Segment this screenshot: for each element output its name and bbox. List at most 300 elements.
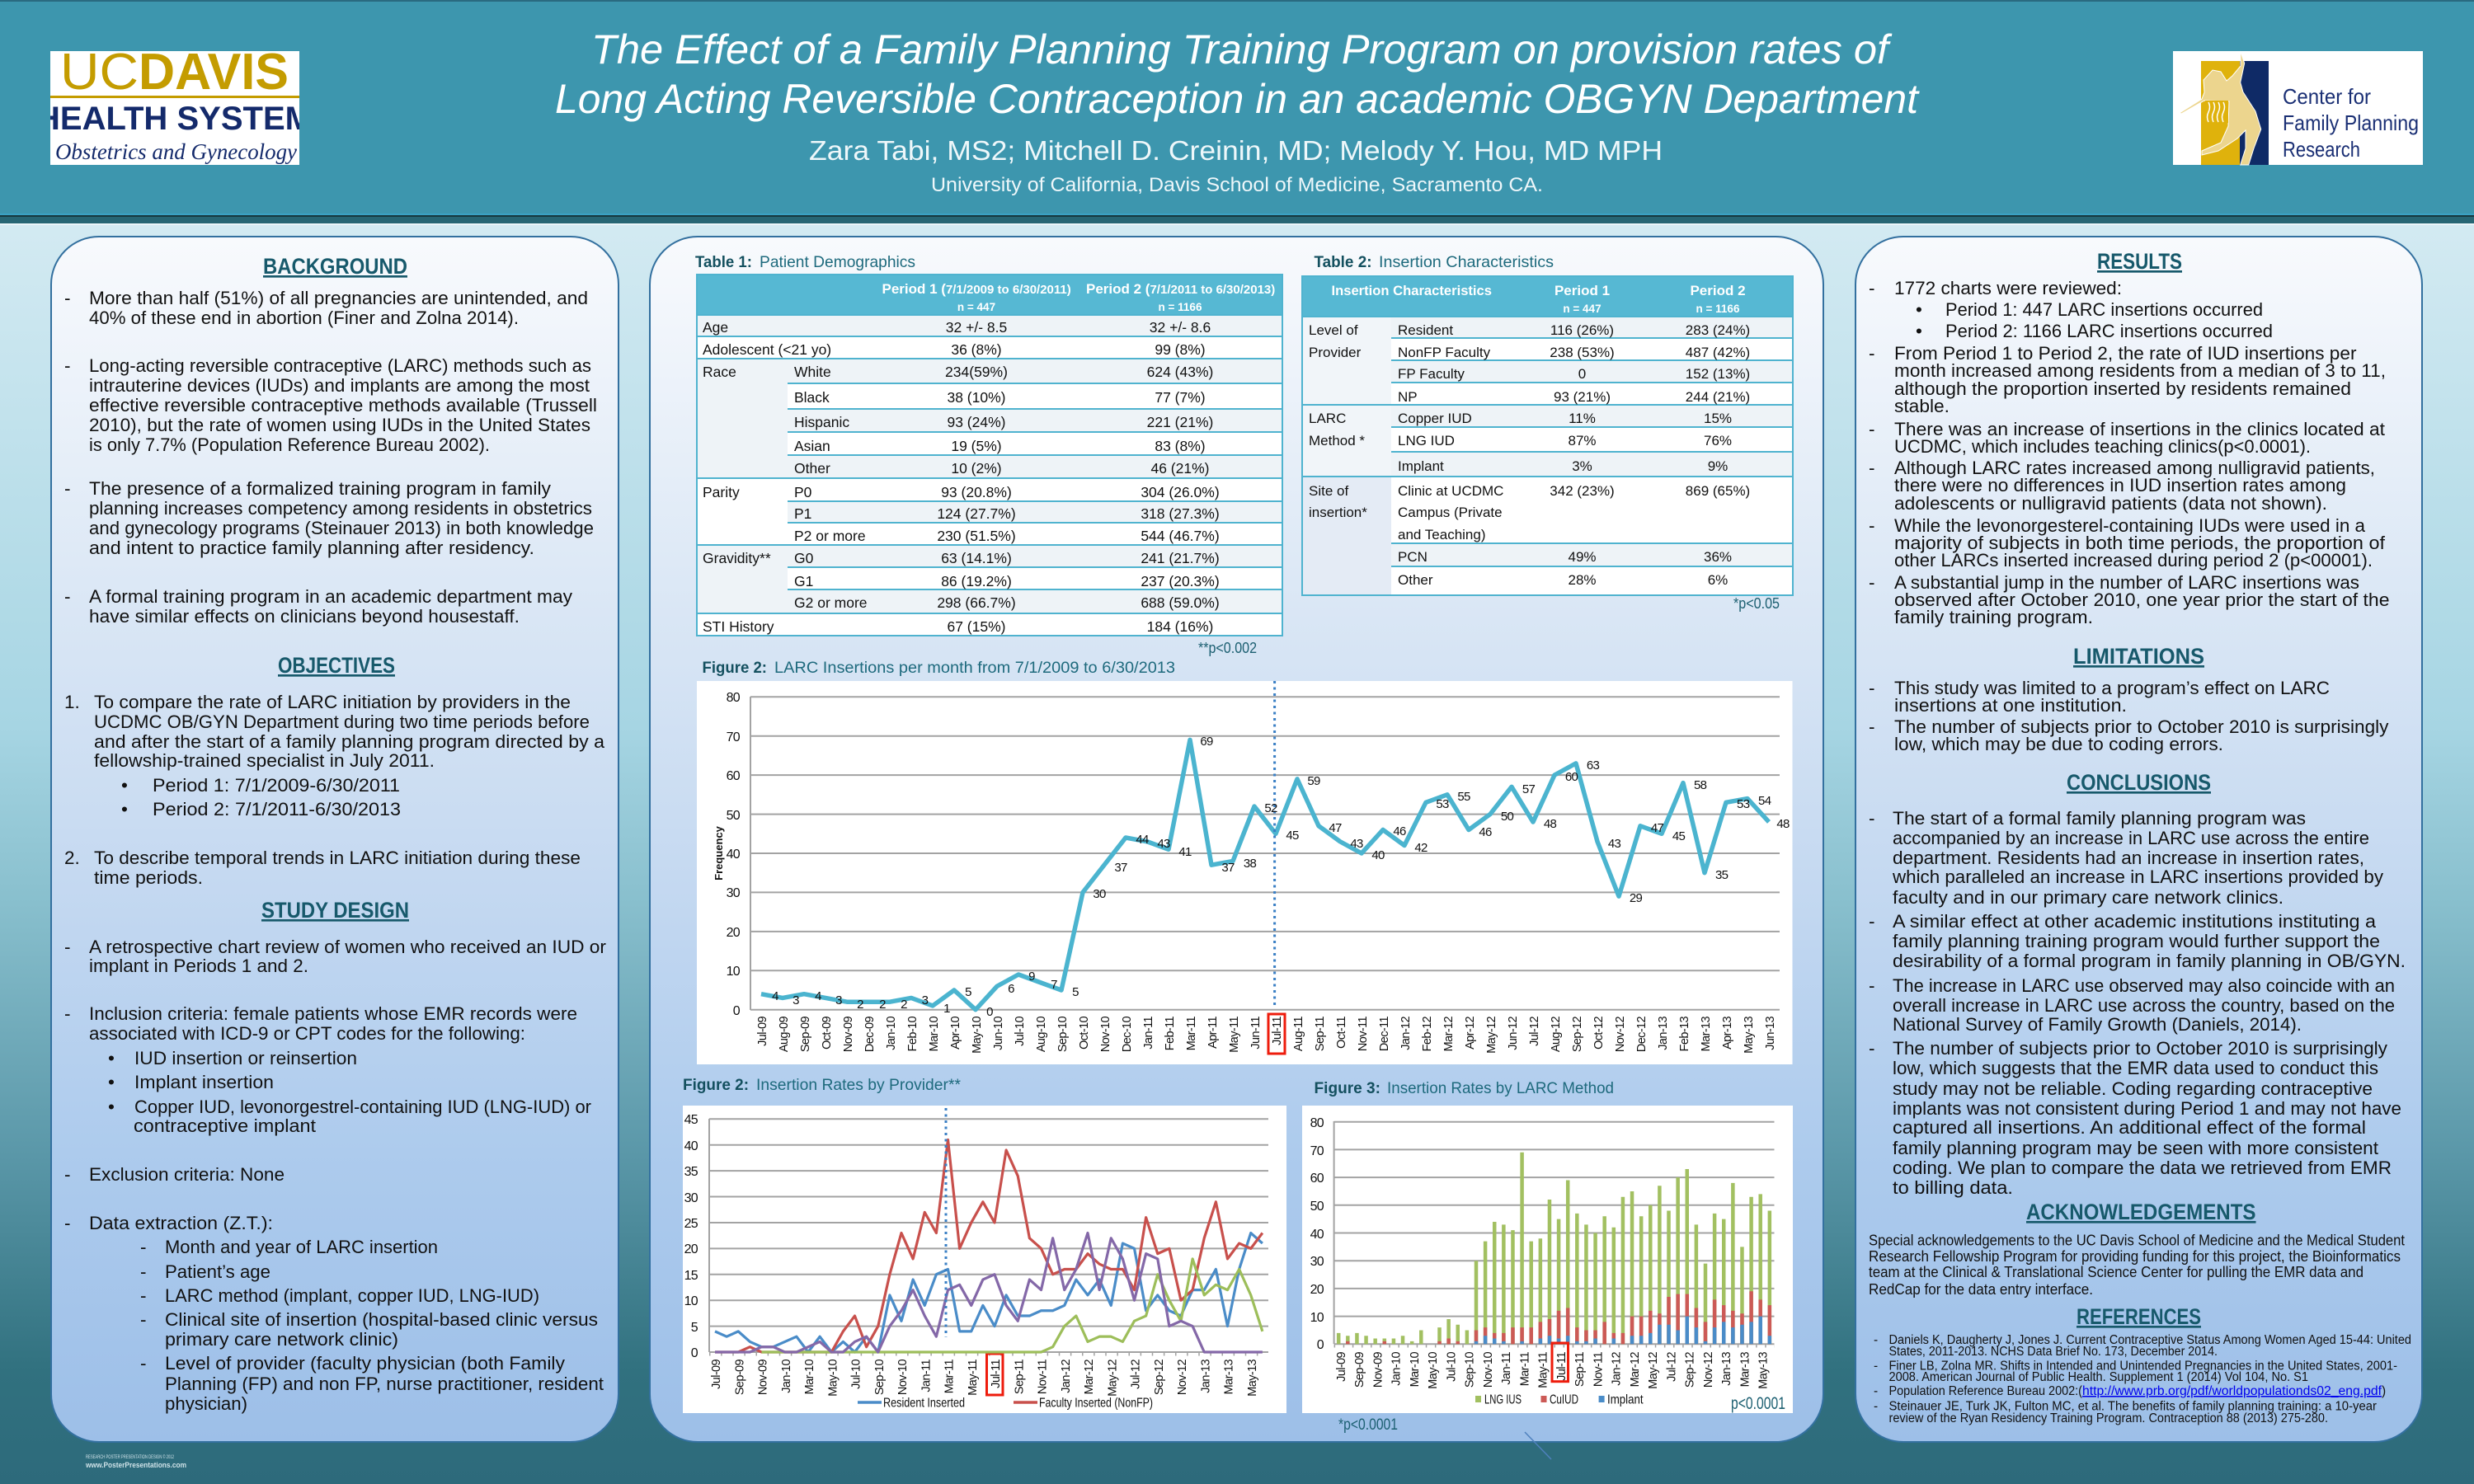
text block: limitations: -	[1869, 716, 1875, 737]
line chart: insertion rates by provider: Jul-11	[990, 1359, 1003, 1388]
table 1: patient demographics: 10 (2%)	[951, 460, 1002, 477]
text block: study design: -	[140, 1353, 147, 1374]
text block: acknowledgements: Research Fellowship Program for providing funding for this project, the Bioinformatics	[1869, 1248, 2401, 1265]
logo: UC Davis Health System	[50, 51, 299, 165]
text block: conclusions: desirability of a formal program in family planning in OB/GYN.	[1893, 951, 2406, 971]
text block: study design: -	[140, 1309, 147, 1330]
line chart: LARC insertions per month: Feb-12	[1421, 1016, 1434, 1051]
text block: results: There was an increase of insertions in the clinics located at	[1894, 419, 2386, 439]
line chart: LARC insertions per month: 47	[1651, 821, 1663, 835]
table 2: insertion characteristics: 76%	[1704, 433, 1732, 448]
line chart: LARC insertions per month	[697, 681, 1793, 1064]
text block: references: http://www.prb.org/pdf/worldpopulationds02_eng.pdf	[2082, 1384, 2382, 1398]
line chart: LARC insertions per month: Oct-09	[821, 1016, 834, 1050]
text block: study design: associated with ICD-9 or CPT codes for the following:	[89, 1023, 525, 1044]
table 2 title: Insertion Characteristics	[1379, 253, 1554, 271]
table 1: patient demographics: 93 (20.8%)	[941, 484, 1012, 500]
text block: conclusions	[1869, 808, 2406, 1198]
line chart: LARC insertions per month: Apr-11	[1206, 1016, 1220, 1049]
table 1: patient demographics: 298 (66.7%)	[937, 594, 1016, 611]
figure title: insertion rates by provider: Insertion Rates by Provider**	[756, 1076, 961, 1094]
table 1: patient demographics: 241 (21.7%)	[1141, 550, 1220, 566]
line chart: insertion rates by provider: May-10	[826, 1359, 840, 1397]
text block: references: -	[1874, 1384, 1878, 1398]
stacked bar chart: insertion rates by LARC method: Mar-11	[1518, 1351, 1531, 1386]
line chart: insertion rates by provider	[683, 1106, 1286, 1413]
text block: references: Population Reference Bureau 2002:(	[1888, 1384, 2083, 1398]
text block: study design: LARC method (implant, copper IUD, LNG-IUD)	[165, 1285, 539, 1306]
table 2: insertion characteristics: 238 (53%)	[1550, 345, 1615, 360]
text block: background: -	[64, 478, 71, 499]
logo: Center for Family Planning Research: Research	[2283, 137, 2360, 162]
stacked bar chart: insertion rates by LARC method: 10	[1310, 1311, 1324, 1325]
table 1: patient demographics: G0	[794, 550, 814, 566]
table 1: patient demographics: 234(59%)	[945, 364, 1008, 380]
text block: results	[1869, 278, 2390, 627]
table 2: insertion characteristics: n = 1166	[1696, 303, 1740, 315]
text block: references: Steinauer JE, Turk JK, Fulton MC, et al. The benefits of family planning training: a 10-year	[1888, 1400, 2377, 1413]
line chart: insertion rates by provider: 10	[684, 1294, 698, 1308]
text block: background: -	[64, 586, 71, 607]
stacked bar chart: insertion rates by LARC method: May-10	[1427, 1351, 1440, 1389]
text block: study design: -	[140, 1237, 147, 1257]
text block: limitations	[1869, 678, 2389, 754]
text block: background: have similar effects on clinicians beyond housestaff.	[89, 606, 520, 627]
text block: study design: primary care network clinic)	[165, 1329, 398, 1350]
table 1: patient demographics: Parity	[703, 484, 740, 500]
table 1: patient demographics: STI History	[703, 618, 774, 635]
table 1: patient demographics: 36 (8%)	[951, 341, 1002, 358]
line chart: LARC insertions per month: 53	[1436, 797, 1449, 811]
table 2: insertion characteristics: insertion*	[1309, 505, 1367, 520]
line chart: LARC insertions per month: Aug-10	[1035, 1016, 1048, 1052]
text block: conclusions: -	[1869, 911, 1875, 932]
text block: objectives: 2.	[64, 848, 80, 868]
table 1: patient demographics: 32 +/- 8.6	[1150, 319, 1211, 336]
table 2: insertion characteristics: 116 (26%)	[1550, 322, 1614, 338]
line chart: LARC insertions per month: Feb-11	[1164, 1016, 1177, 1050]
table 2: insertion characteristics: Provider	[1309, 345, 1362, 360]
text block: study design: -	[140, 1261, 147, 1282]
table 1: patient demographics: 221 (21%)	[1147, 414, 1213, 430]
line chart: LARC insertions per month: Jul-12	[1528, 1016, 1541, 1046]
line chart: insertion rates by provider: Nov-10	[896, 1359, 910, 1395]
text block: results: A substantial jump in the number of LARC insertions was	[1894, 572, 2359, 593]
text block: background	[64, 288, 597, 627]
stacked bar chart: insertion rates by LARC method: 60	[1310, 1172, 1324, 1186]
table 2: insertion characteristics: Level of	[1309, 322, 1358, 338]
line chart: LARC insertions per month: 54	[1758, 794, 1771, 808]
line chart: insertion rates by provider: 20	[684, 1242, 698, 1256]
table 1: patient demographics: Period 2 (7/1/2011 to 6/30/2013)	[1086, 281, 1275, 297]
line chart: LARC insertions per month: Feb-13	[1678, 1016, 1691, 1051]
line chart: LARC insertions per month: 0	[986, 1005, 993, 1019]
line chart: LARC insertions per month: 9	[1028, 970, 1035, 984]
table 2: insertion characteristics: Insertion Characteristics	[1331, 283, 1492, 298]
stacked bar chart: insertion rates by LARC method: Mar-10	[1409, 1351, 1422, 1387]
text block: objectives: To describe temporal trends in LARC initiation during these	[94, 848, 581, 868]
line chart: LARC insertions per month: Jan-12	[1399, 1016, 1413, 1050]
text block: conclusions: The start of a formal family planning program was	[1893, 808, 2306, 829]
text block: background: and intent to practice family planning after residency.	[89, 538, 534, 558]
figure title: LARC insertions per month: Figure 2:	[703, 659, 767, 677]
line chart: LARC insertions per month: Jul-11	[1271, 1016, 1284, 1045]
line chart: insertion rates by provider: Jan-13	[1199, 1359, 1212, 1393]
text block: conclusions: accompanied by an increase in LARC use across the entire	[1893, 828, 2369, 848]
line chart: LARC insertions per month: Jun-10	[992, 1016, 1005, 1050]
table 2: insertion characteristics: 6%	[1708, 572, 1728, 588]
text block: study design: -	[140, 1285, 147, 1306]
line chart: LARC insertions per month: Dec-09	[863, 1016, 877, 1052]
table 2: insertion characteristics: NP	[1398, 389, 1418, 405]
logo: Center for Family Planning Research: Center for	[2283, 84, 2371, 109]
text block: results: month increased among residents from a median of 3 to 11,	[1894, 360, 2386, 381]
table 1 title: Table 1:	[695, 253, 752, 271]
text block: objectives: Period 1: 7/1/2009-6/30/2011	[153, 775, 400, 796]
text block: study design: -	[64, 1003, 71, 1024]
text block: references: 2008. American Journal of Public Health. Supplement 1 (2014) Vol 104, No. S1	[1888, 1370, 2308, 1384]
stacked bar chart: insertion rates by LARC method: p<0.0001	[1731, 1394, 1785, 1413]
line chart: LARC insertions per month: 70	[727, 730, 741, 744]
heading: background: BACKGROUND	[263, 254, 407, 279]
table 2: insertion characteristics: 152 (13%)	[1686, 366, 1750, 382]
line chart: LARC insertions per month: 69	[1200, 735, 1213, 749]
text block: limitations: low, which may be due to coding errors.	[1894, 734, 2223, 754]
line chart: insertion rates by provider: 15	[684, 1269, 698, 1283]
stacked bar chart: insertion rates by LARC method: Jan-12	[1611, 1351, 1624, 1386]
line chart: insertion rates by provider: 30	[684, 1191, 698, 1205]
table 2: insertion characteristics: Method *	[1309, 433, 1365, 448]
line chart: LARC insertions per month: 43	[1608, 837, 1620, 851]
text block: conclusions: The number of subjects prior to October 2010 is surprisingly	[1893, 1038, 2388, 1059]
table 1: patient demographics: 184 (16%)	[1147, 618, 1213, 635]
line chart: LARC insertions per month: Feb-10	[906, 1016, 920, 1051]
line chart: LARC insertions per month: 4	[815, 989, 821, 1003]
line chart: LARC insertions per month: 1	[943, 1002, 950, 1016]
table 2: insertion characteristics: Site of	[1309, 483, 1348, 499]
stacked bar chart: insertion rates by LARC method: Jan-13	[1720, 1351, 1733, 1386]
panel: middle column (tables and figures)	[650, 237, 1823, 1442]
line chart: LARC insertions per month: Mar-11	[1185, 1016, 1198, 1050]
text block: background: planning increases competency among residents in obstetrics	[89, 498, 592, 519]
line chart: LARC insertions per month: Aug-12	[1550, 1016, 1563, 1052]
line chart: LARC insertions per month: 63	[1587, 758, 1599, 773]
table 2: insertion characteristics: LNG IUD	[1398, 433, 1455, 448]
table 1 footnote: **p<0.002	[1198, 640, 1257, 656]
text block: conclusions: -	[1869, 1038, 1875, 1059]
authors: Zara Tabi, MS2; Mitchell D. Creinin, MD; Melody Y. Hou, MD MPH	[809, 135, 1663, 166]
text block: results: -	[1869, 572, 1875, 593]
text block: references: -	[1874, 1400, 1878, 1413]
table 1: patient demographics: 99 (8%)	[1155, 341, 1206, 358]
text block: objectives: To compare the rate of LARC initiation by providers in the	[94, 692, 571, 712]
line chart: LARC insertions per month: Sep-11	[1314, 1016, 1327, 1051]
stacked bar chart: insertion rates by LARC method: May-11	[1537, 1351, 1550, 1388]
table 2 footnote: *p<0.05	[1733, 595, 1780, 612]
text block: results: stable.	[1894, 396, 1950, 416]
line chart: LARC insertions per month: Jun-12	[1507, 1016, 1520, 1050]
table 2: insertion characteristics: 869 (65%)	[1686, 483, 1750, 499]
stacked bar chart: insertion rates by LARC method: Nov-09	[1372, 1351, 1385, 1388]
text block: conclusions: -	[1869, 808, 1875, 829]
line chart: LARC insertions per month: 46	[1393, 824, 1406, 838]
table 2: insertion characteristics: 342 (23%)	[1550, 483, 1615, 499]
line chart: LARC insertions per month: 38	[1244, 857, 1256, 871]
logo: Center for Family Planning Research	[2173, 51, 2423, 165]
line chart: insertion rates by provider: May-13	[1246, 1359, 1259, 1397]
line chart: LARC insertions per month: 40	[1371, 848, 1385, 862]
stacked bar chart: insertion rates by LARC method: May-13	[1757, 1351, 1770, 1389]
line chart: LARC insertions per month: 48	[1776, 817, 1790, 831]
table 1: patient demographics: 46 (21%)	[1150, 460, 1210, 477]
line chart: insertion rates by provider: 5	[691, 1321, 698, 1335]
text block: results: -	[1869, 343, 1875, 364]
line chart: insertion rates by provider: Sep-10	[873, 1359, 887, 1395]
table 2: insertion characteristics: 49%	[1568, 549, 1597, 565]
table 1: patient demographics: Period 1 (7/1/2009 to 6/30/2011)	[882, 281, 1071, 297]
text block: acknowledgements: Special acknowledgements to the UC Davis School of Medicine and the Medical Student	[1869, 1232, 2405, 1248]
footer credit	[85, 1454, 186, 1470]
table 1: patient demographics: 67 (15%)	[947, 618, 1006, 635]
line chart: LARC insertions per month: 53	[1737, 797, 1750, 811]
stacked bar chart: insertion rates by LARC method: 70	[1310, 1144, 1324, 1158]
table 1: patient demographics: 624 (43%)	[1147, 364, 1213, 380]
text block: acknowledgements	[1869, 1232, 2405, 1298]
line chart: insertion rates by provider: 35	[684, 1165, 698, 1179]
text block: conclusions: A similar effect at other academic institutions instituting a	[1893, 911, 2376, 932]
line chart: LARC insertions per month: 20	[727, 926, 741, 940]
line chart: LARC insertions per month: 80	[727, 691, 741, 705]
line chart: LARC insertions per month: 0	[733, 1004, 741, 1018]
table 2: insertion characteristics: Copper IUD	[1398, 411, 1472, 426]
table 2: insertion characteristics: Implant	[1398, 458, 1444, 474]
heading: objectives: OBJECTIVES	[278, 653, 395, 678]
table 2: insertion characteristics	[1302, 276, 1793, 595]
text block: study design: Implant insertion	[134, 1072, 274, 1092]
stacked bar chart: insertion rates by LARC method: Nov-12	[1702, 1351, 1715, 1388]
line chart: LARC insertions per month: Jan-13	[1657, 1016, 1670, 1050]
line chart: insertion rates by provider: Mar-12	[1083, 1359, 1096, 1394]
line chart: insertion rates by provider: Nov-12	[1176, 1359, 1189, 1395]
line chart: LARC insertions per month: Frequency	[713, 825, 725, 881]
table 2: insertion characteristics: NonFP Faculty	[1398, 345, 1491, 360]
line chart: LARC insertions per month: Jan-11	[1142, 1016, 1155, 1050]
table 1: patient demographics: 124 (27.7%)	[937, 505, 1016, 522]
line chart: LARC insertions per month: 35	[1715, 868, 1729, 882]
line chart: insertion rates by provider: Jan-12	[1060, 1359, 1073, 1393]
table 1: patient demographics: 230 (51.5%)	[937, 528, 1016, 544]
text block: objectives	[64, 692, 604, 888]
table 2: insertion characteristics: Other	[1398, 572, 1433, 588]
table 1: patient demographics: G1	[794, 573, 813, 589]
line chart: LARC insertions per month: Mar-12	[1442, 1016, 1456, 1051]
line chart: LARC insertions per month: 47	[1329, 821, 1342, 835]
text block: conclusions: National Survey of Family Growth (Daniels, 2014).	[1893, 1014, 2302, 1035]
line chart: LARC insertions per month: 2	[901, 998, 907, 1012]
line chart: LARC insertions per month: 42	[1414, 841, 1427, 855]
table 2: insertion characteristics: Period 2	[1690, 283, 1746, 298]
text block: background: effective reversible contraceptive methods available (Trussell	[89, 395, 597, 416]
line chart: insertion rates by provider: Nov-11	[1036, 1359, 1049, 1394]
text block: results: •	[1916, 321, 1922, 341]
table 2: insertion characteristics: 244 (21%)	[1686, 389, 1750, 405]
line chart: insertion rates by provider: 40	[684, 1139, 698, 1153]
table 2: insertion characteristics: Period 1	[1554, 283, 1610, 298]
table 2: insertion characteristics: 0	[1578, 366, 1586, 382]
table 1: patient demographics	[697, 275, 1282, 636]
text block: results: -	[1869, 515, 1875, 536]
stacked bar chart: insertion rates by LARC method: May-12	[1647, 1351, 1660, 1389]
text block: results: there were no differences in IUD insertion rates among	[1894, 475, 2346, 495]
line chart: insertion rates by provider: Mar-13	[1222, 1359, 1235, 1394]
line chart: insertion rates by provider: Jul-12	[1130, 1359, 1143, 1389]
line chart: LARC insertions per month: 2	[879, 998, 886, 1012]
table 2 title: Table 2:	[1315, 253, 1372, 271]
text block: conclusions: low, which suggests that the EMR data used to conduct this	[1893, 1058, 2378, 1078]
stacked bar chart: insertion rates by LARC method: Jul-11	[1555, 1351, 1569, 1381]
text block: study design: A retrospective chart review of women who received an IUD or	[89, 937, 606, 957]
logo: UC Davis Health System: DAVIS	[139, 44, 289, 101]
text block: study design: -	[64, 937, 71, 957]
table 1: patient demographics: 63 (14.1%)	[941, 550, 1012, 566]
line chart: LARC insertions per month: Jun-11	[1249, 1016, 1263, 1050]
line chart: LARC insertions per month: 2	[857, 998, 863, 1012]
line chart: LARC insertions per month: Oct-10	[1078, 1016, 1091, 1050]
line chart: insertion rates by provider: May-11	[967, 1359, 980, 1396]
table 1: patient demographics: Hispanic	[794, 414, 849, 430]
table 1: patient demographics: 38 (10%)	[947, 389, 1006, 406]
stacked bar chart: insertion rates by LARC method: Sep-12	[1684, 1351, 1697, 1388]
text block: results: •	[1916, 299, 1922, 320]
line chart: LARC insertions per month: 41	[1178, 845, 1192, 859]
line chart: LARC insertions per month: Dec-11	[1378, 1016, 1391, 1051]
table 1: patient demographics: White	[794, 364, 831, 380]
text block: conclusions: to billing data.	[1893, 1177, 2013, 1198]
text block: references: -	[1874, 1359, 1878, 1374]
line chart: LARC insertions per month: 55	[1457, 790, 1470, 804]
line chart: insertion rates by provider: Sep-09	[733, 1359, 746, 1395]
text block: acknowledgements: RedCap for the data entry interface.	[1869, 1281, 2093, 1298]
stacked bar chart: insertion rates by LARC method: 0	[1317, 1338, 1324, 1352]
logo: UC Davis Health System: Obstetrics and Gynecology	[55, 139, 297, 164]
text block: study design: Patient’s age	[165, 1261, 270, 1282]
text block: background: 2010), but the rate of women using IUDs in the United States	[89, 415, 590, 435]
table 1: patient demographics: 77 (7%)	[1155, 389, 1206, 406]
heading: references: REFERENCES	[2077, 1304, 2201, 1329]
text block: results: -	[1869, 278, 1875, 298]
text block: results: Although LARC rates increased among nulligravid patients,	[1894, 458, 2375, 478]
text block: background: -	[64, 355, 71, 376]
line chart: LARC insertions per month: 57	[1522, 782, 1535, 796]
line chart: insertion rates by provider: 0	[691, 1346, 698, 1360]
line chart: LARC insertions per month: Jun-13	[1764, 1016, 1777, 1050]
logo: UC Davis Health System: UC	[60, 44, 139, 101]
text block: background: is only 7.7% (Population Reference Bureau 2002).	[89, 434, 490, 455]
stacked bar chart: insertion rates by LARC method: Nov-10	[1482, 1351, 1495, 1388]
text block: study design: Planning (FP) and non FP, nurse practitioner, resident	[165, 1374, 604, 1394]
text block: objectives: Period 2: 7/1/2011-6/30/2013	[153, 799, 401, 819]
line chart: LARC insertions per month: Oct-12	[1592, 1016, 1606, 1050]
text block: background: 40% of these end in abortion (Finer and Zolna 2014).	[89, 308, 519, 328]
line chart: LARC insertions per month: 37	[1114, 861, 1127, 875]
table 1: patient demographics: Age	[703, 319, 728, 336]
text block: conclusions: study may not be reliable. Coding regarding contraceptive	[1893, 1078, 2373, 1099]
table 2: insertion characteristics: Clinic at UCDMC	[1398, 483, 1503, 499]
header band	[0, 0, 2474, 225]
stacked bar chart: insertion rates by LARC method: Jul-12	[1665, 1351, 1678, 1382]
table 1: patient demographics: Adolescent (<21 yo)	[703, 341, 831, 358]
line chart: LARC insertions per month: 59	[1307, 774, 1320, 788]
poster title	[555, 26, 1920, 122]
text block: conclusions: department. Residents had an increase in insertion rates,	[1893, 848, 2364, 868]
text block: background: -	[64, 288, 71, 308]
text block: references	[1874, 1333, 2411, 1425]
text block: study design: Exclusion criteria: None	[89, 1164, 285, 1185]
text block: study design: Month and year of LARC insertion	[165, 1237, 438, 1257]
stacked bar chart: insertion rates by LARC method: 40	[1310, 1228, 1324, 1242]
stacked bar chart: insertion rates by LARC method: Mar-12	[1629, 1351, 1642, 1387]
line chart: LARC insertions per month: Jul-10	[1014, 1016, 1027, 1046]
table 1: patient demographics: Gravidity**	[703, 550, 771, 566]
line chart: LARC insertions per month: 45	[1286, 829, 1299, 843]
line chart: LARC insertions per month: May-13	[1743, 1016, 1756, 1054]
text block: results: family training program.	[1894, 607, 2093, 627]
text block: objectives: •	[121, 799, 128, 819]
text block: results: -	[1869, 458, 1875, 478]
table 2: insertion characteristics: 93 (21%)	[1554, 389, 1611, 405]
line chart: LARC insertions per month: 4	[772, 989, 778, 1003]
text block: study design: implant in Periods 1 and 2.	[89, 956, 308, 976]
table 1 title: Patient Demographics	[760, 253, 915, 271]
line chart: LARC insertions per month: 60	[727, 769, 741, 783]
text block: background: and gynecology programs (Steinauer 2013) in both knowledge	[89, 518, 594, 538]
text block: results: -	[1869, 419, 1875, 439]
text block: objectives: UCDMC OB/GYN Department during two time periods before	[94, 711, 590, 732]
line chart: LARC insertions per month: May-10	[971, 1016, 984, 1054]
stacked bar chart: insertion rates by LARC method: 20	[1310, 1283, 1324, 1297]
text block: results: observed after October 2010, one year prior the start of the	[1894, 589, 2390, 610]
table 2: insertion characteristics: 487 (42%)	[1686, 345, 1750, 360]
logo: UC Davis Health System: HEALTH SYSTEM	[36, 101, 313, 137]
line chart: insertion rates by provider: Jul-10	[849, 1359, 863, 1389]
text block: results: While the levonorgesterel-containing IUDs were used in a	[1894, 515, 2365, 536]
table 1: patient demographics: 237 (20.3%)	[1141, 573, 1220, 589]
table 2: insertion characteristics: 28%	[1568, 572, 1597, 588]
table 1: patient demographics: 86 (19.2%)	[941, 573, 1012, 589]
stacked bar chart: insertion rates by LARC method: Mar-13	[1738, 1351, 1752, 1387]
line chart: insertion rates by provider: Faculty Inserted (NonFP)	[1039, 1397, 1153, 1411]
panel: right column (results, limitations, conclusions, acknowledgements, references)	[1856, 237, 2422, 1442]
text block: conclusions: family planning program may be seen with more consistent	[1893, 1138, 2379, 1158]
stacked bar chart: insertion rates by LARC method: Sep-09	[1353, 1351, 1366, 1388]
line chart: LARC insertions per month: Sep-10	[1056, 1016, 1070, 1052]
text block: results: Period 2: 1166 LARC insertions occurred	[1945, 321, 2273, 341]
text block: conclusions: implants was not consistent during Period 1 and may not have	[1893, 1098, 2401, 1119]
figure title: LARC insertions per month: LARC Insertions per month from 7/1/2009 to 6/30/2013	[774, 659, 1175, 677]
text block: limitations: insertions at one institution.	[1894, 695, 2127, 716]
poster title: The Effect of a Family Planning Training Program on provision rates of	[591, 26, 1893, 73]
line chart: LARC insertions per month: 3	[835, 993, 842, 1007]
table 2: insertion characteristics: 9%	[1708, 458, 1728, 474]
table 2: insertion characteristics: FP Faculty	[1398, 366, 1465, 382]
text block: results: UCDMC, which includes teaching clinics(p<0.0001).	[1894, 436, 2311, 457]
table 1: patient demographics: Black	[794, 389, 830, 406]
text block: background: More than half (51%) of all pregnancies are unintended, and	[89, 288, 588, 308]
poster title: Long Acting Reversible Contraception in an academic OBGYN Department	[555, 76, 1920, 122]
line chart: LARC insertions per month: May-12	[1485, 1016, 1498, 1054]
line chart: LARC insertions per month: 5	[965, 985, 971, 999]
line chart: LARC insertions per month: Apr-13	[1721, 1016, 1734, 1050]
